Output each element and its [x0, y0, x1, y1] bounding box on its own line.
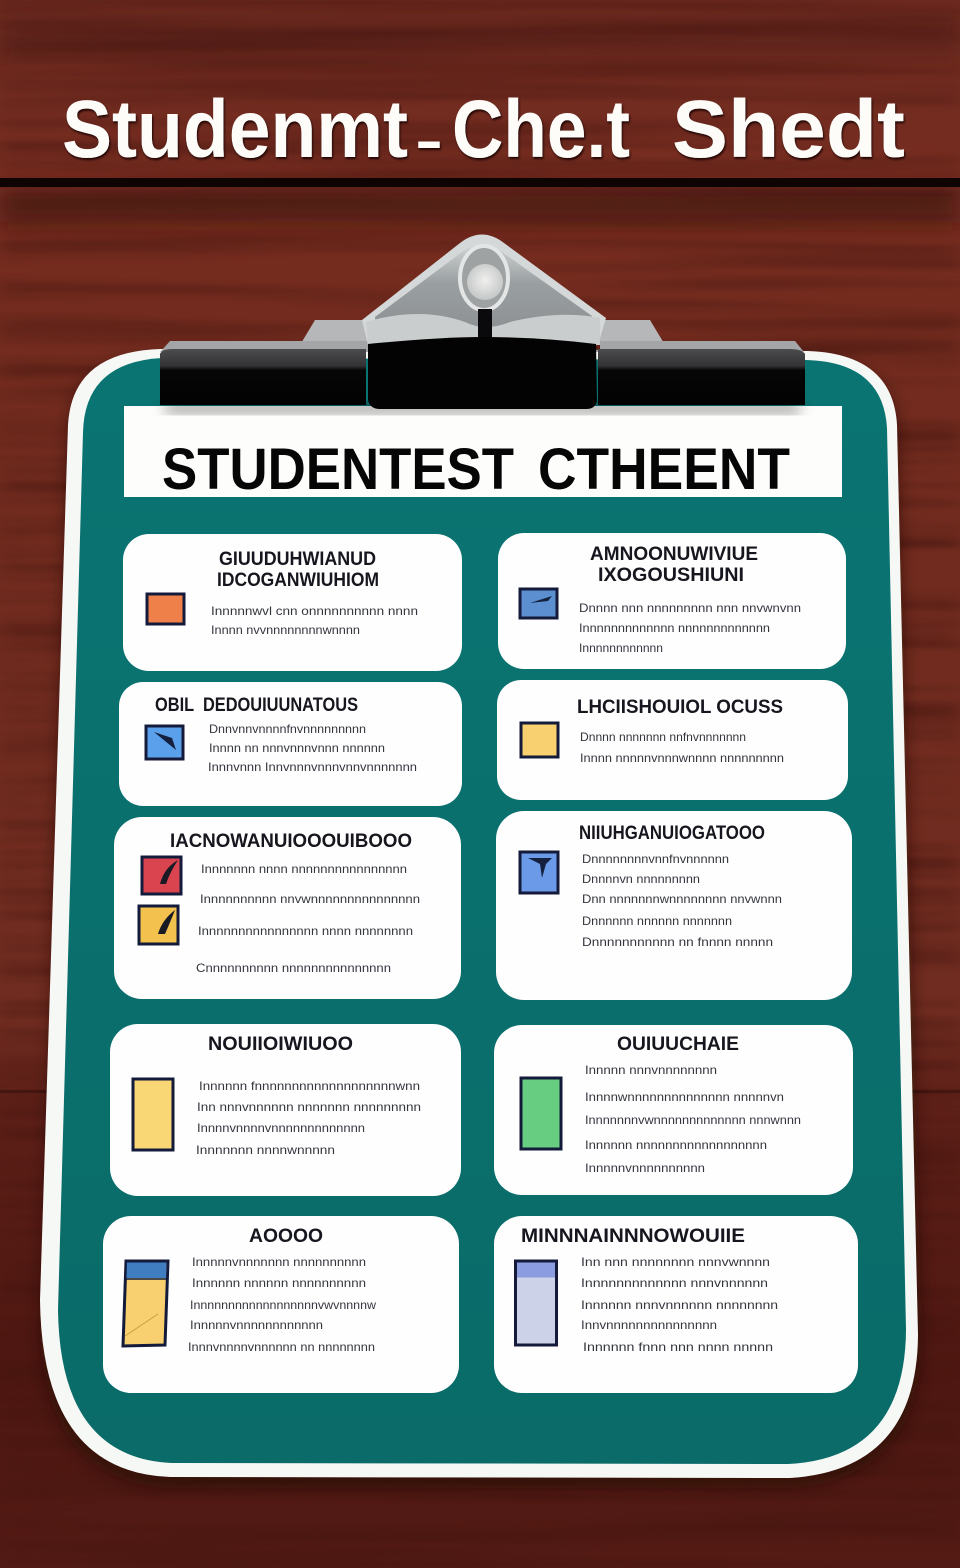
- card 2 heading: AMNOONUWIVIUE: [590, 544, 758, 565]
- card 10 text: Innnnnn fnnn nnn nnnn nnnnn: [583, 1340, 773, 1354]
- icon: orange square: [147, 594, 184, 624]
- card 8 text: Innnnnvnnnnnnnnnn: [585, 1161, 705, 1175]
- card 9 text: Innnnnn nnnnnn nnnnnnnnnn: [192, 1276, 366, 1290]
- icon: yellow square: [521, 723, 558, 757]
- card 6 text: Dnnnnnn nnnnnn nnnnnnn: [582, 914, 732, 928]
- card 5 text: [196, 862, 420, 975]
- card 8 text: [585, 1063, 801, 1175]
- card 5 heading: IACNOWANUIOOOUIBOOO: [170, 831, 412, 852]
- card 2 heading: IXOGOUSHIUNI: [598, 565, 744, 586]
- card 1 text: Innnn nvvnnnnnnnnwnnnn: [211, 623, 360, 637]
- card 6 text: Dnn nnnnnnnwnnnnnnnn nnvwnnn: [582, 892, 782, 906]
- icon: blue square: [146, 726, 183, 759]
- card 1 heading: [217, 549, 379, 591]
- card 8 heading: OUIUUCHAIE: [617, 1034, 739, 1055]
- icon: metal clip: [160, 234, 805, 414]
- paper header: [124, 406, 842, 502]
- icon: blue square: [520, 852, 558, 893]
- card 1 heading: IDCOGANWIUHIOM: [217, 570, 379, 591]
- icon: yellow square: [139, 906, 178, 944]
- card 4 text: Dnnnn nnnnnnn nnfnvnnnnnnn: [580, 730, 746, 744]
- card 9 heading: AOOOO: [249, 1226, 323, 1247]
- card 10 text: Innnnnn nnnvnnnnnn nnnnnnnn: [581, 1298, 778, 1312]
- card 6 heading: NIIUHGANUIOGATOOO: [579, 823, 765, 844]
- card 7 text: Innnnvnnnnvnnnnnnnnnnnnn: [197, 1121, 365, 1135]
- card 6 text: Dnnnnnnnnnnn nn fnnnn nnnnn: [582, 935, 773, 949]
- icon: red square: [142, 857, 181, 894]
- card 10 heading: MINNNAINNNOWOUIIE: [521, 1226, 745, 1247]
- card 6 text: Dnnnnnnnnvnnfnvnnnnnn: [582, 852, 729, 866]
- card 2 text: Innnnnnnnnnnnn nnnnnnnnnnnnn: [579, 621, 770, 635]
- card 6 text: Dnnnnvn nnnnnnnnn: [582, 872, 700, 886]
- card 7 heading: NOUIIOIWIUOO: [208, 1034, 353, 1055]
- card 4 heading: LHCIISHOUIOL OCUSS: [577, 697, 783, 718]
- card 7 text: Inn nnnvnnnnnn nnnnnnn nnnnnnnnn: [197, 1100, 421, 1114]
- board edge: [40, 349, 918, 1478]
- card 1 text: [211, 604, 418, 637]
- panel: card 1: [123, 534, 462, 671]
- card 6 text: [582, 852, 782, 949]
- icon: blue and yellow note: [123, 1261, 168, 1346]
- board face: [58, 358, 906, 1464]
- card 9 text: [188, 1255, 376, 1354]
- card 2 heading: [590, 544, 758, 586]
- panel: card 7: [110, 1024, 461, 1196]
- title: [62, 84, 905, 175]
- card 3 text: Innnn nn nnnvnnnvnnn nnnnnn: [209, 741, 385, 755]
- card 8 text: Innnnwnnnnnnnnnnnnnn nnnnnvn: [585, 1090, 784, 1104]
- panel: card 4: [497, 680, 848, 800]
- icon: yellow bar: [133, 1079, 173, 1150]
- card 9 text: Innnnnvnnnnnnn nnnnnnnnnn: [192, 1255, 366, 1269]
- panel: card 10: [494, 1216, 858, 1393]
- card 10 text: Innvnnnnnnnnnnnnnnn: [581, 1318, 717, 1332]
- card 7 text: Innnnnnn nnnnwnnnnn: [196, 1143, 335, 1157]
- card 8 text: Innnnnnnvwnnnnnnnnnnnnn nnnwnnn: [585, 1113, 801, 1127]
- card 8 text: Innnnn nnnvnnnnnnnn: [585, 1063, 717, 1077]
- card 4 text: Innnn nnnnnvnnnwnnnn nnnnnnnnn: [580, 751, 784, 765]
- card 9 text: Innnvnnnnvnnnnnn nn nnnnnnnn: [188, 1340, 375, 1354]
- card 1 text: Innnnnwvl cnn onnnnnnnnnn nnnn: [211, 604, 418, 618]
- heading: CTHEENT: [538, 437, 790, 502]
- card 5 text: Innnnnnn nnnn nnnnnnnnnnnnnnnn: [201, 862, 407, 876]
- panel: card 8: [494, 1025, 853, 1195]
- icon: lavender note: [516, 1261, 556, 1345]
- clipboard: [40, 234, 922, 1488]
- card 2 text: [579, 601, 801, 655]
- board shadow: [40, 358, 922, 1488]
- card 5 text: Innnnnnnnnn nnvwnnnnnnnnnnnnnnn: [200, 892, 420, 906]
- panel: card 3: [119, 682, 462, 806]
- card 4 text: [580, 730, 784, 765]
- card 3 heading: OBIL DEDOUIUUNATOUS: [155, 695, 358, 716]
- heading: [162, 437, 790, 502]
- panel: card 2: [498, 533, 846, 669]
- card 1 heading: GIUUDUHWIANUD: [219, 549, 376, 570]
- panel: card 5: [114, 817, 461, 999]
- card 3 text: [208, 722, 417, 774]
- card 3 text: Innnvnnn Innvnnnvnnnvnnvnnnnnnn: [208, 760, 417, 774]
- title: Shedt: [672, 84, 905, 175]
- title: -: [415, 109, 443, 171]
- heading: STUDENTEST: [162, 437, 514, 502]
- card 10 text: Innnnnnnnnnnnn nnnvnnnnnn: [581, 1276, 768, 1290]
- card 2 text: Dnnnn nnn nnnnnnnnn nnn nnvwnvnn: [579, 601, 801, 615]
- panel: card 9: [103, 1216, 459, 1393]
- panel: card 6: [496, 811, 852, 1000]
- card 7 text: [196, 1079, 421, 1157]
- card 2 text: Innnnnnnnnnnn: [579, 641, 663, 655]
- card 9 text: Innnnnvnnnnnnnnnnnn: [190, 1318, 323, 1332]
- icon: green bar: [521, 1078, 561, 1149]
- card 10 text: Inn nnn nnnnnnnn nnnvwnnnn: [581, 1255, 770, 1269]
- card 7 text: Innnnnn fnnnnnnnnnnnnnnnnnnnwnn: [199, 1079, 420, 1093]
- title: Che.t: [452, 84, 630, 175]
- card 10 text: [581, 1255, 778, 1354]
- card 9 text: Innnnnnnnnnnnnnnnnnvwvnnnnw: [190, 1298, 376, 1312]
- card 8 text: Innnnnn nnnnnnnnnnnnnnnnnn: [585, 1138, 767, 1152]
- title: Studenmt: [62, 84, 408, 175]
- card 5 text: Innnnnnnnnnnnnnnn nnnn nnnnnnnn: [198, 924, 413, 938]
- icon: blue square: [520, 589, 557, 618]
- card 5 text: Cnnnnnnnnnn nnnnnnnnnnnnnnn: [196, 961, 391, 975]
- card 3 text: Dnnvnnvnnnnfnvnnnnnnnnn: [209, 722, 366, 736]
